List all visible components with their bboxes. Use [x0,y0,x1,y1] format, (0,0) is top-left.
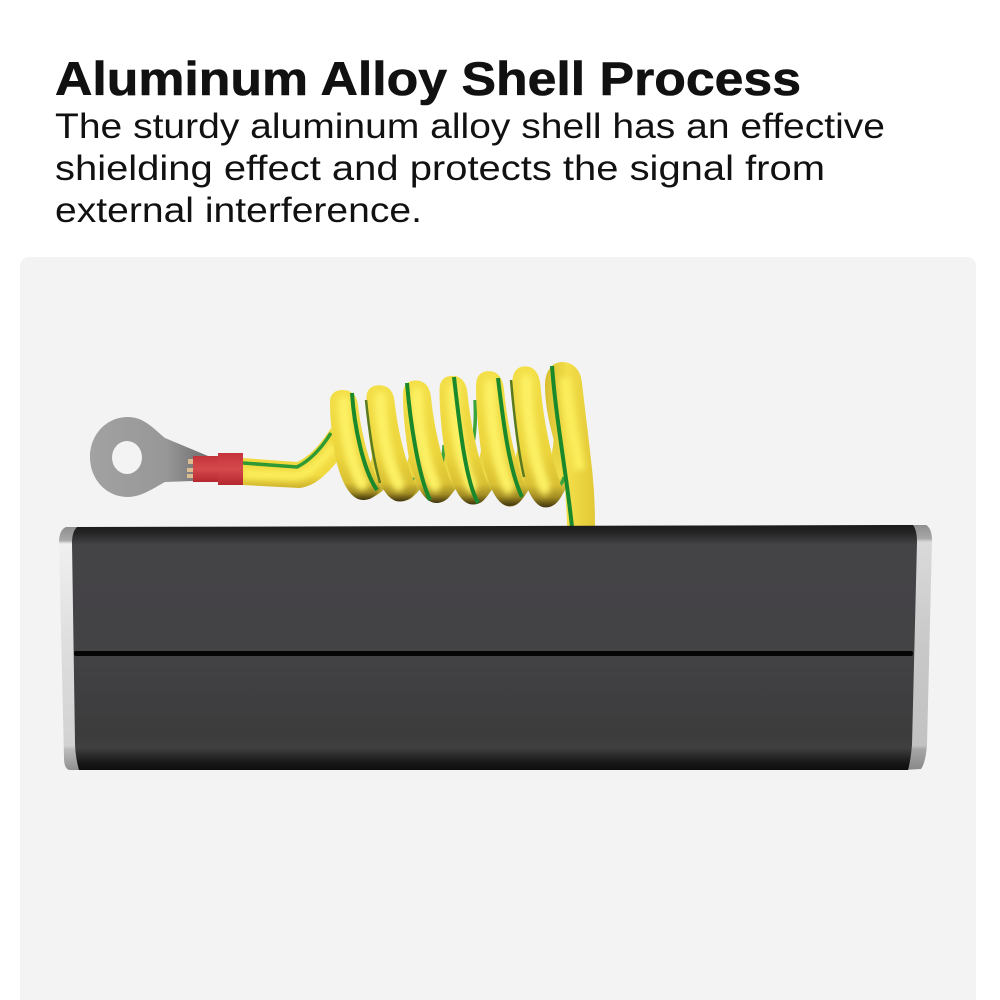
ring terminal lug [90,417,208,497]
panel: product image background [20,257,976,1000]
description text: shielding effect and protects the signal from [55,149,825,188]
right aluminum end cap [904,525,932,770]
coil back strands [367,398,567,494]
last strand highlight [565,378,580,470]
strand 5 [476,371,527,506]
strand 4 [440,376,490,504]
cable green stripe [243,433,331,467]
copper wire strands [187,459,194,478]
strand 1 [330,390,381,500]
description text: The sturdy aluminum alloy shell has an effective [55,107,885,146]
cable highlight [243,446,334,476]
coil front strands [330,362,595,528]
description text: external interference. [55,191,422,230]
last strand into shell [545,362,595,528]
strand 6 [512,366,564,507]
black shell body [72,525,917,770]
title: Aluminum Alloy Shell Process [55,52,801,105]
description text [55,107,885,230]
shell seam groove [74,651,913,656]
left aluminum end cap [59,527,82,770]
aluminum shell device [59,525,932,770]
inner green stripe glimpses [408,400,564,485]
red crimp sleeve [193,453,243,485]
strand 3 [403,381,454,503]
icon: grounding wire with ring terminal [90,362,595,528]
strand green stripes [352,366,572,527]
straight cable section [243,428,340,488]
strand 2 [366,385,418,502]
